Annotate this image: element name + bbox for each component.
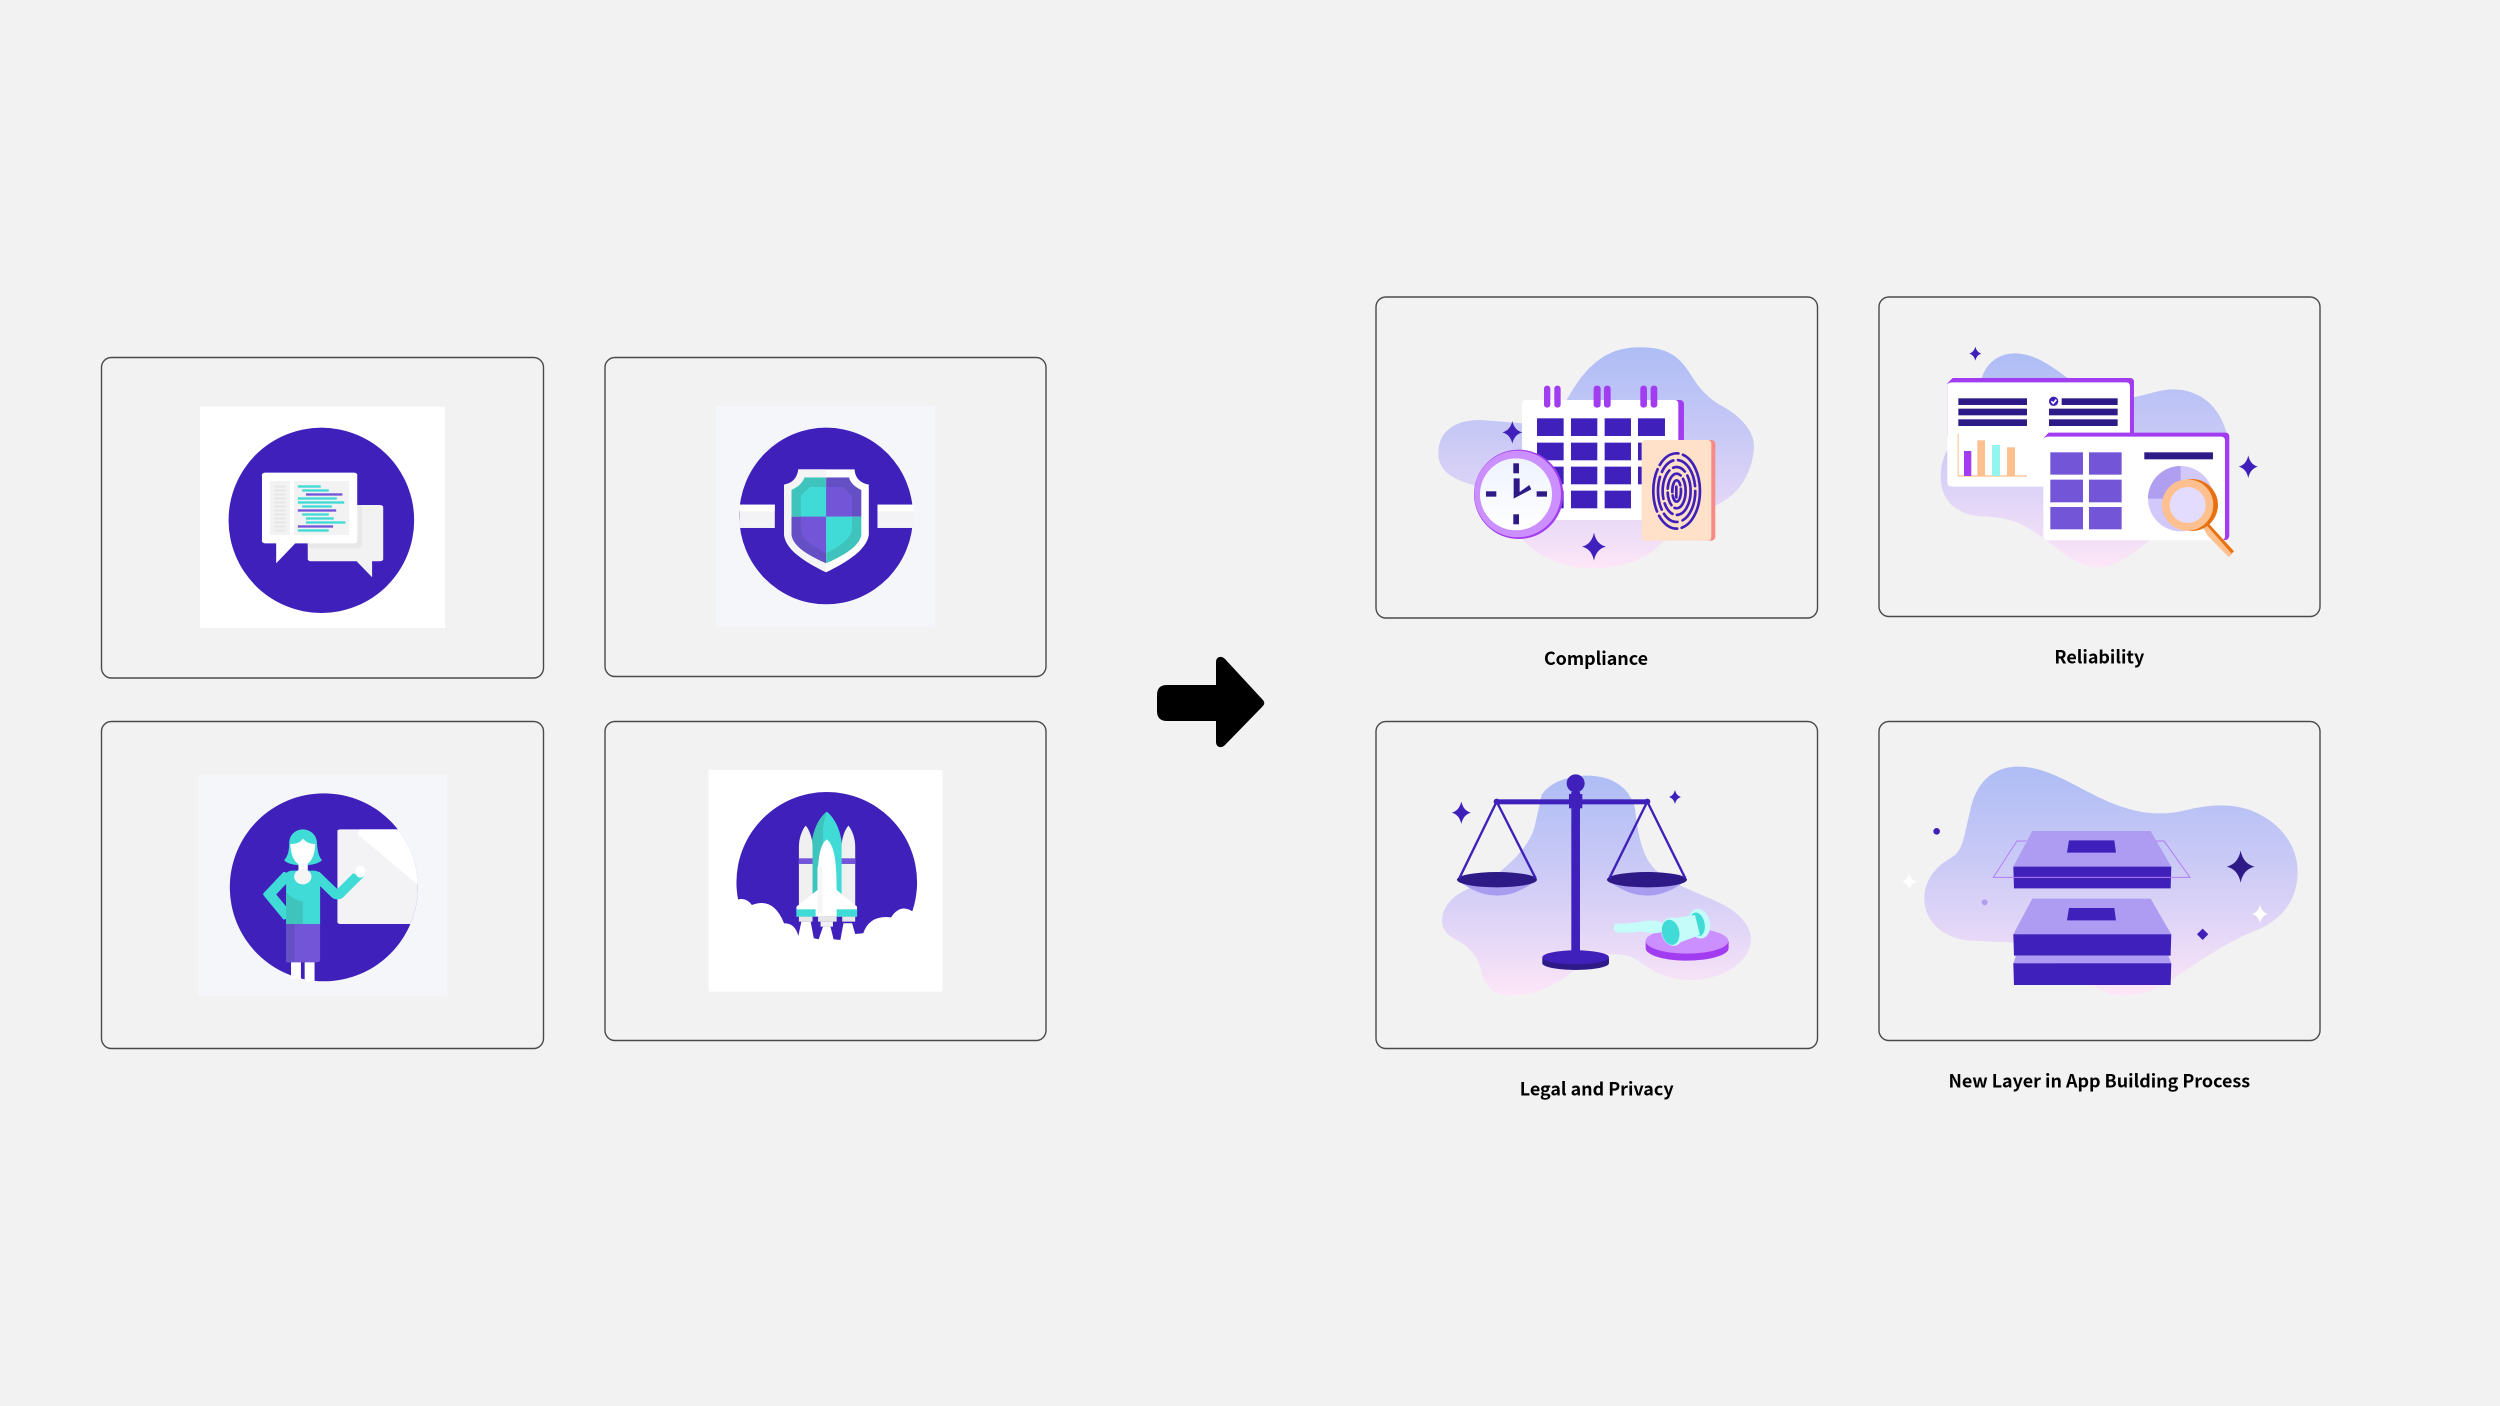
illustration: reliability (1941, 347, 2258, 567)
icon: rocket (796, 812, 857, 927)
label: Reliability: Reliability (2054, 644, 2145, 670)
report card: back (1947, 378, 2134, 487)
icon: calendar (1522, 386, 1684, 520)
label: Compliance: Compliance (1544, 645, 1648, 671)
panel: legal and privacy (1376, 722, 1818, 1102)
panel: chat and code (102, 358, 544, 678)
panel: compliance (1376, 297, 1818, 671)
report card: front (2043, 433, 2229, 540)
panel: presenter (102, 722, 544, 1048)
sparkles and dots (1902, 828, 2268, 940)
shield connector bands (740, 505, 913, 528)
icon: clock (1474, 450, 1563, 539)
illustration: compliance (1438, 347, 1754, 568)
arrow (1157, 657, 1264, 747)
icon: back speech bubble (308, 505, 383, 577)
icon: shield (784, 469, 869, 572)
infographic canvas (100, 296, 2321, 1100)
panel: security shield (605, 358, 1046, 676)
layer: top floating (1993, 831, 2190, 888)
image tile: shield (739, 428, 914, 604)
icon: fingerprint card (1642, 440, 1715, 541)
label: New Layer in App Building Process: New Layer in App Building Process (1948, 1068, 2250, 1094)
label: Legal and Privacy: Legal and Privacy (1520, 1076, 1674, 1102)
presentation board (337, 829, 418, 924)
bar chart (1958, 434, 2027, 477)
pie chart (2148, 466, 2213, 531)
illustration: stacked layers (1902, 767, 2298, 996)
panel: new layer in app building process (1879, 722, 2320, 1094)
sparkles (1502, 421, 1606, 561)
icon: scales (1457, 774, 1687, 970)
figure: woman presenting (269, 829, 365, 981)
illustration: scales and gavel (1442, 774, 1751, 996)
layer: bottom (2013, 956, 2171, 985)
sparkles (1969, 347, 2258, 478)
panel: reliability (1879, 297, 2320, 670)
launch clouds (733, 899, 922, 977)
image tile: rocket (709, 770, 942, 992)
image tile: chat (200, 407, 445, 628)
icon: magnifying glass (2162, 479, 2234, 557)
layer: middle (2013, 899, 2171, 956)
icon: gavel (1614, 907, 1729, 961)
image tile: presenter (230, 793, 418, 982)
panel: rocket launch (605, 722, 1046, 1040)
icon: front speech bubble with code (262, 473, 357, 563)
sparkles (1452, 790, 1681, 824)
